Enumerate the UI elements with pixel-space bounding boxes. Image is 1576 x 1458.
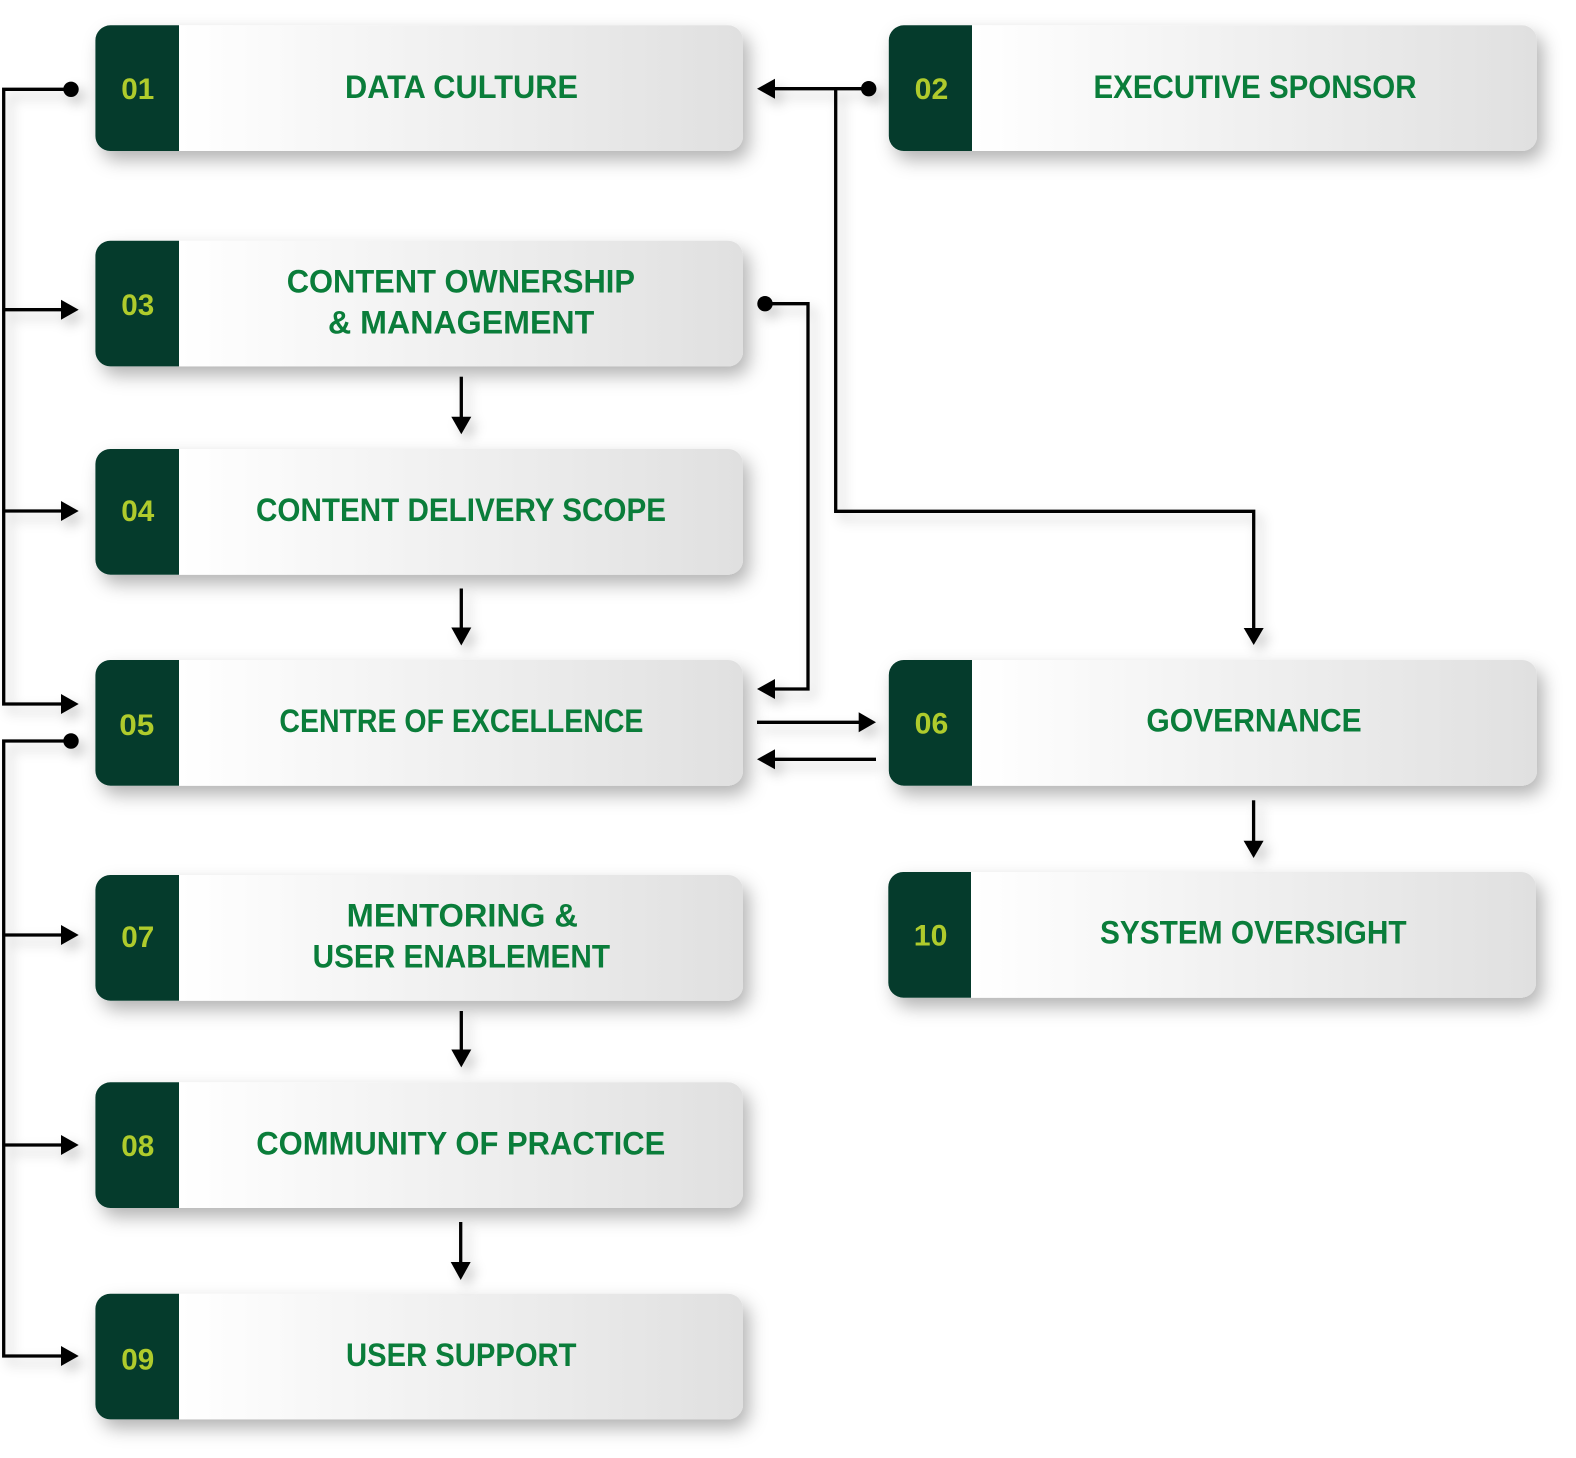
arrow: box 06 to box 10 (1244, 800, 1264, 858)
box 04: content delivery scope: CONTENT DELIVERY SCOPE (256, 492, 666, 528)
box 06: governance: 06 (915, 708, 948, 740)
arrow: governance to centre of excellence (757, 749, 876, 769)
box 02: executive sponsor: EXECUTIVE SPONSOR (1094, 69, 1416, 105)
box 04: content delivery scope: 04 (121, 495, 155, 528)
box 02: executive sponsor: 02 (915, 73, 948, 106)
box 06: governance: GOVERNANCE (1146, 703, 1362, 739)
box 04: content delivery scope (95, 449, 743, 575)
box 05: centre of excellence: 05 (119, 709, 154, 742)
arrow: executive sponsor to data culture and governance (757, 79, 1264, 645)
box 03: content ownership and management: 03 (121, 289, 154, 322)
box 07: mentoring and user enablement (95, 875, 743, 1001)
box 10: system oversight: 10 (914, 920, 947, 953)
box 03: content ownership and management: CONTENT OWNERSHIP (287, 264, 635, 300)
arrow: centre of excellence to governance (757, 712, 876, 732)
box 01: data culture: DATA CULTURE (345, 69, 578, 105)
arrow: box 08 to box 09 (451, 1222, 471, 1280)
box 09: user support: 09 (121, 1344, 154, 1377)
arrow: content ownership to centre of excellence (757, 296, 808, 699)
box 06: governance (889, 660, 1537, 786)
box 08: community of practice: 08 (121, 1130, 154, 1163)
box 07: mentoring and user enablement: 07 (121, 921, 154, 954)
arrow: centre of excellence bus to boxes 07, 08, 09 (4, 733, 79, 1366)
arrow: box 07 to box 08 (451, 1011, 471, 1067)
box 07: mentoring and user enablement: USER ENABLEMENT (313, 939, 610, 975)
arrow: box 04 to box 05 (451, 588, 471, 646)
box 08: community of practice: COMMUNITY OF PRACTICE (256, 1126, 665, 1162)
box 01: data culture: 01 (121, 73, 154, 106)
box 05: centre of excellence (95, 660, 743, 786)
box 08: community of practice (95, 1082, 743, 1208)
box 10: system oversight (888, 872, 1536, 998)
arrow: box 03 to box 04 (451, 377, 471, 434)
box 09: user support (95, 1294, 743, 1419)
box 03: content ownership and management (95, 241, 743, 366)
box 07: mentoring and user enablement: MENTORING & (347, 898, 578, 934)
box 05: centre of excellence: CENTRE OF EXCELLENCE (279, 703, 643, 739)
box 03: content ownership and management: & MANAGEMENT (328, 304, 595, 340)
box 01: data culture (95, 25, 743, 151)
box 10: system oversight: SYSTEM OVERSIGHT (1100, 915, 1407, 951)
box 02: executive sponsor (889, 25, 1537, 151)
arrow: data culture bus to boxes 03, 04, 05 (4, 82, 79, 714)
box 09: user support: USER SUPPORT (346, 1337, 577, 1373)
